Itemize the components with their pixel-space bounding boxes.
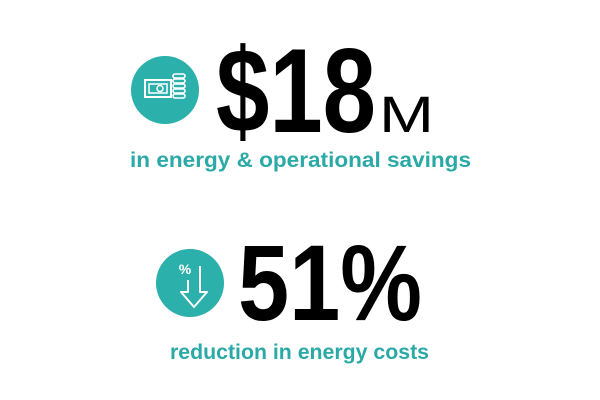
caption: reduction: reduction in energy costs <box>170 341 429 364</box>
stat block: savings <box>130 24 471 172</box>
icon: percent down arrow <box>156 249 224 317</box>
icon: money and coins <box>131 56 199 124</box>
icon: percent down arrow: % <box>179 261 192 277</box>
stat block: cost reduction <box>156 222 429 364</box>
big number: $18M: $18 <box>216 24 376 158</box>
big number: 51%: 51% <box>238 222 422 343</box>
stat block: savings: M <box>379 86 434 143</box>
caption: savings: in energy & operational savings <box>130 149 471 172</box>
